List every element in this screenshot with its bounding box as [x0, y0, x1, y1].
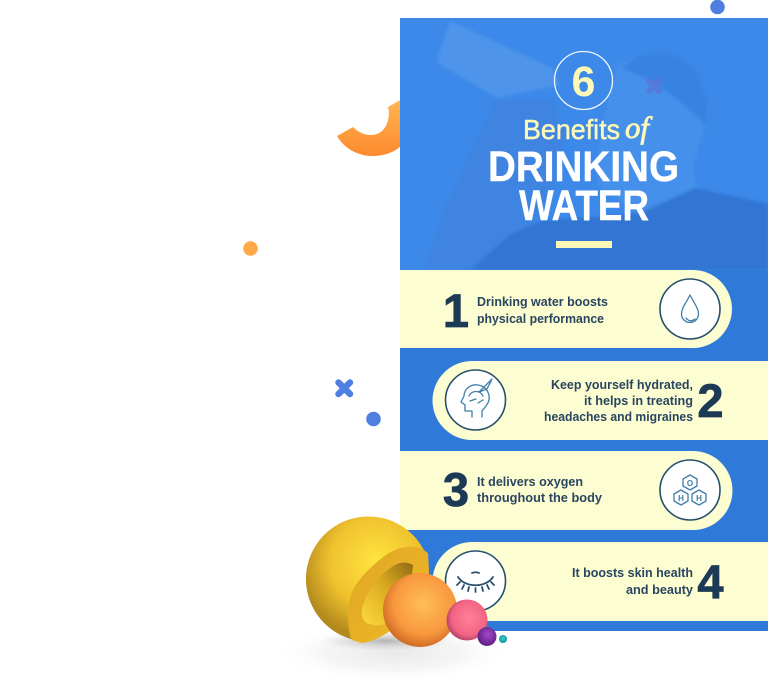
icon: water molecule	[660, 460, 720, 520]
contact shadow	[319, 631, 451, 651]
heading number badge	[554, 52, 612, 110]
benefit 4	[433, 542, 768, 621]
icon: head with migraine bolt	[446, 370, 506, 430]
silhouette: hair	[622, 54, 707, 125]
decorative orange dot	[243, 241, 258, 256]
yellow hollow sphere	[306, 516, 429, 643]
icon: water molecule: H	[696, 494, 702, 503]
heading: benefits of: Benefits	[523, 114, 620, 145]
icon: water drop	[660, 279, 720, 339]
text 1: Drinking water boosts	[477, 295, 608, 309]
3D spheres illustration	[281, 516, 507, 681]
number 2: 2	[697, 374, 724, 427]
number 3: 3	[443, 463, 469, 516]
heading: benefits of: of	[625, 110, 653, 145]
icon: water molecule: O	[687, 479, 693, 488]
number 4: 4	[697, 555, 724, 608]
ribbon 3	[400, 451, 732, 530]
heading: drinking water	[488, 143, 679, 230]
text 2: it helps in treating	[584, 394, 693, 408]
icon: closed eye	[446, 551, 506, 611]
orange sphere	[383, 573, 457, 647]
text 4: It boosts skin health	[572, 566, 693, 580]
text 1: physical performance	[477, 312, 604, 326]
silhouette: head	[600, 60, 704, 212]
silhouette: bottle	[436, 21, 560, 98]
teal sphere	[499, 635, 507, 643]
benefit 2	[433, 361, 768, 440]
ribbon 2	[433, 361, 768, 440]
infographic panel	[400, 18, 768, 631]
heading: drinking water: WATER	[519, 182, 649, 230]
text 4: and beauty	[626, 583, 693, 597]
pink sphere	[446, 600, 488, 640]
text 2: headaches and migraines	[544, 410, 693, 424]
number 1: 1	[443, 284, 469, 337]
heading: drinking water: DRINKING	[488, 143, 679, 191]
ground shadow	[281, 625, 505, 681]
text 3: throughout the body	[477, 491, 602, 505]
decorative purple cross in header	[649, 81, 659, 91]
decorative blue dot top	[710, 0, 725, 14]
purple sphere	[478, 627, 496, 646]
decorative orange arc	[337, 99, 402, 156]
decorative blue dot left	[366, 412, 381, 426]
heading: benefits of	[523, 110, 653, 145]
header photo background	[400, 18, 768, 270]
benefit 1	[400, 270, 732, 348]
icon: water molecule: H	[678, 494, 684, 503]
decorative blue cross	[338, 382, 350, 394]
silhouette: arm and hand	[425, 100, 565, 270]
heading number badge: 6	[572, 58, 595, 106]
silhouette: shirt	[470, 188, 768, 270]
text 2: Keep yourself hydrated,	[551, 378, 693, 392]
ribbon 1	[400, 270, 732, 348]
text 3: It delivers oxygen	[477, 475, 583, 489]
benefit 3	[400, 451, 732, 530]
ribbon 4	[433, 542, 768, 621]
heading underline	[556, 241, 612, 248]
